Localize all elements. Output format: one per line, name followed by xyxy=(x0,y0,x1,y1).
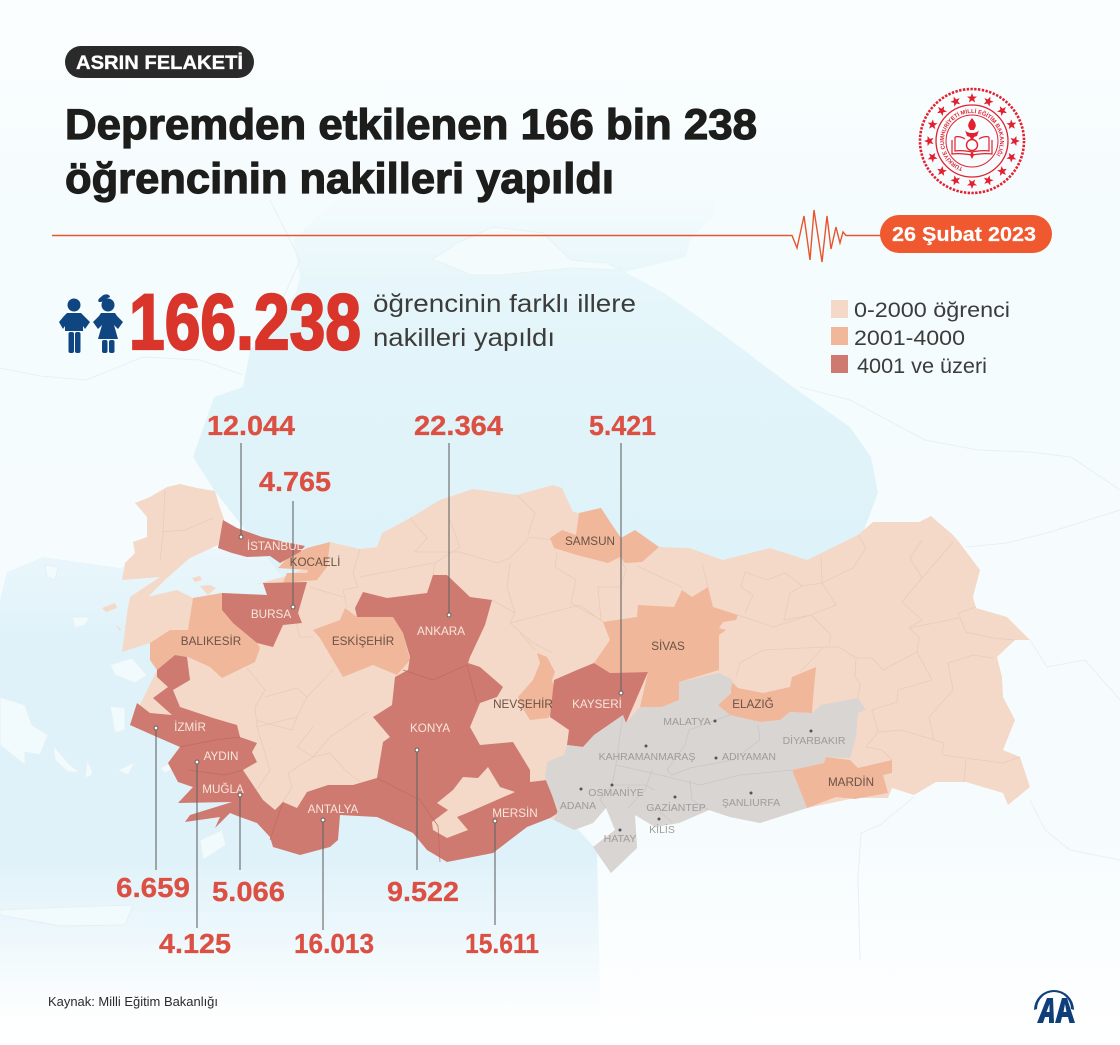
province labels dark: BALIKESİR xyxy=(181,635,241,648)
numeric callouts: 12.044 xyxy=(207,410,295,441)
kocaeli xyxy=(278,542,330,583)
legend: 2001-4000 xyxy=(854,327,965,350)
province labels light: KONYA xyxy=(410,722,450,735)
category badge xyxy=(65,46,254,78)
balikesir xyxy=(150,593,260,678)
elazig xyxy=(718,667,816,722)
eskisehir xyxy=(313,608,410,677)
province labels dark: MARDİN xyxy=(828,776,874,789)
nevsehir xyxy=(518,653,558,720)
title: öğrencinin nakilleri yapıldı xyxy=(65,155,614,203)
base provinces 0-2000 xyxy=(122,485,1030,873)
province labels dark: SAMSUN xyxy=(565,535,615,548)
province labels dark xyxy=(181,535,874,789)
province labels dark: SİVAS xyxy=(651,640,685,653)
province labels dark: ELAZIĞ xyxy=(732,698,774,711)
karaman cutout xyxy=(432,767,515,838)
icon: anadolu agency logo xyxy=(1034,990,1075,1023)
crimea xyxy=(432,227,621,275)
kayseri xyxy=(550,663,648,747)
bursa xyxy=(222,582,307,647)
province labels gray: ŞANLIURFA xyxy=(722,797,780,809)
black sea xyxy=(193,200,878,600)
category badge: ASRIN FELAKETİ xyxy=(76,53,243,74)
province labels gray: ADIYAMAN xyxy=(722,751,776,763)
headline caption: öğrencinin farklı illere xyxy=(373,290,636,318)
title xyxy=(65,101,757,203)
timeline rule with seismograph xyxy=(52,210,882,262)
headline caption xyxy=(373,290,636,352)
province labels gray: GAZİANTEP xyxy=(646,801,706,814)
province labels dark: KOCAELİ xyxy=(290,556,340,569)
province labels gray: MALATYA xyxy=(663,716,711,728)
numeric callouts: 5.421 xyxy=(589,410,656,441)
ankara konya mersin antalya mugla aydin izmir xyxy=(130,575,558,862)
date pill xyxy=(880,215,1052,253)
title: Depremden etkilenen 166 bin 238 xyxy=(65,101,757,149)
numeric callouts: 9.522 xyxy=(387,876,459,907)
numeric callouts xyxy=(116,410,656,959)
province labels dark: ESKİŞEHİR xyxy=(332,635,394,648)
numeric callouts: 16.013 xyxy=(294,928,374,959)
numeric callouts: 4.125 xyxy=(159,928,231,959)
faint neighbouring borders xyxy=(0,200,1120,960)
ministry seal: TÜRKİYE CUMHURİYETİ MİLLİ EĞİTİM BAKANLIĞI xyxy=(940,108,1004,172)
province labels light: ANTALYA xyxy=(308,803,359,816)
gray city dots xyxy=(580,720,812,832)
neighbouring land and islands xyxy=(0,565,226,926)
marmara and aegean islands xyxy=(102,576,216,631)
sivas xyxy=(594,587,738,707)
legend: 0-2000 öğrenci xyxy=(854,299,1010,322)
province labels light: AYDIN xyxy=(204,750,238,763)
numeric callouts: 5.066 xyxy=(212,876,285,907)
province labels gray: ADANA xyxy=(560,800,596,812)
province labels gray: KAHRAMANMARAŞ xyxy=(599,751,695,763)
earthquake zone provinces xyxy=(545,673,866,873)
province borders xyxy=(160,490,1020,802)
province labels light: İZMİR xyxy=(174,721,206,734)
legend: 4001 ve üzeri xyxy=(857,355,987,378)
province labels light: ANKARA xyxy=(417,625,465,638)
numeric callouts: 4.765 xyxy=(259,466,331,497)
province labels light xyxy=(174,540,622,820)
istanbul xyxy=(218,520,305,563)
mardin xyxy=(792,757,892,808)
samsun xyxy=(550,508,659,563)
leader lines and pins xyxy=(156,443,621,930)
province labels gray xyxy=(560,716,846,845)
province labels light: BURSA xyxy=(251,608,291,621)
province labels gray: OSMANİYE xyxy=(588,786,644,799)
icon: boy and girl students xyxy=(59,294,123,353)
province labels light: MUĞLA xyxy=(202,783,244,796)
province labels light: İSTANBUL xyxy=(247,540,304,553)
numeric callouts: 15.611 xyxy=(465,928,539,959)
mediterranean and aegean sea xyxy=(0,545,601,1045)
source note: Kaynak: Milli Eğitim Bakanlığı xyxy=(48,994,218,1009)
province labels light: MERSİN xyxy=(492,807,538,820)
legend xyxy=(831,299,1010,378)
provinces 4001 and above xyxy=(130,520,648,862)
map of Turkey xyxy=(102,443,1030,930)
province labels gray: DİYARBAKIR xyxy=(783,734,846,747)
red and gray inner borders xyxy=(180,665,477,862)
province labels dark: NEVŞEHİR xyxy=(493,698,553,711)
numeric callouts: 6.659 xyxy=(116,872,190,903)
province labels gray: KİLİS xyxy=(649,823,675,836)
headline caption: nakilleri yapıldı xyxy=(373,324,555,352)
ministry seal xyxy=(918,88,1026,194)
date pill: 26 Şubat 2023 xyxy=(892,224,1036,246)
headline number: 166.238 xyxy=(129,277,361,366)
numeric callouts: 22.364 xyxy=(414,410,503,441)
province labels light: KAYSERİ xyxy=(572,698,622,711)
thrace xyxy=(122,484,224,613)
province labels gray: HATAY xyxy=(604,833,636,845)
provinces 2001-4000 xyxy=(150,508,892,808)
